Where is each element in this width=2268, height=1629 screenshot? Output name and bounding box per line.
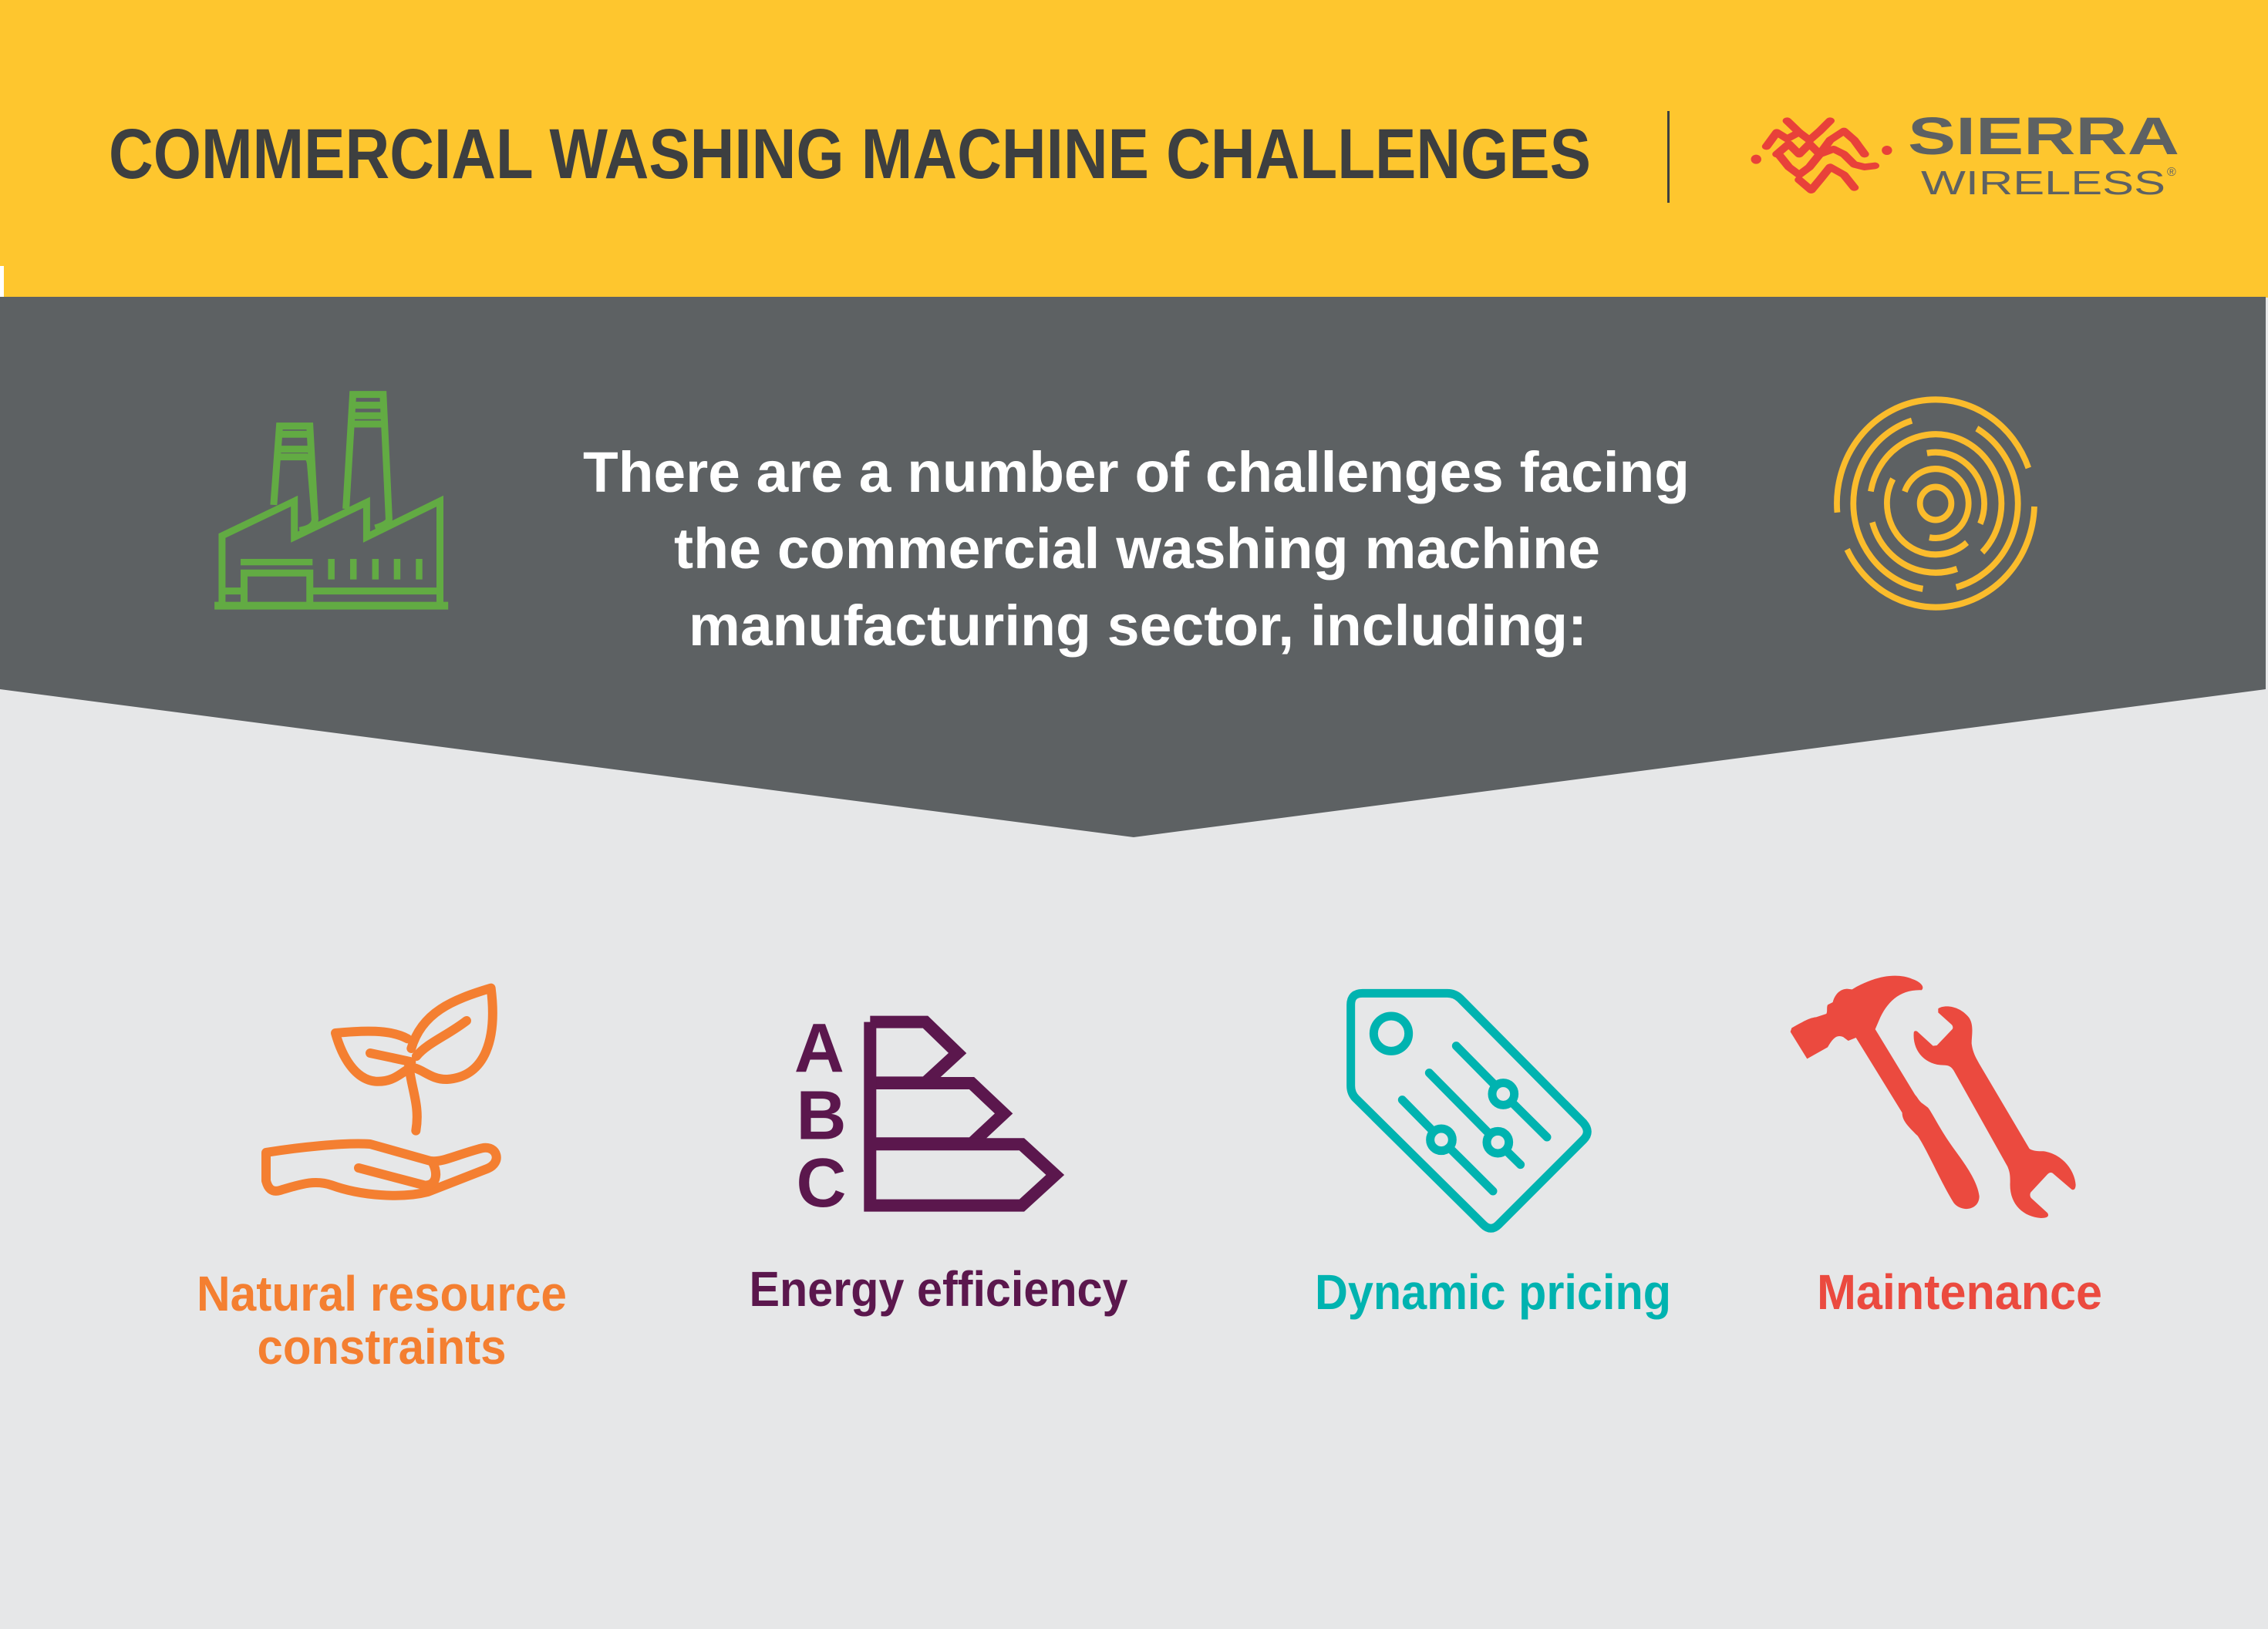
label: Energy efficiency xyxy=(750,1261,1128,1317)
icon: hammer and wrench xyxy=(1791,976,2076,1218)
label: Maintenance xyxy=(1817,1264,2102,1320)
header band xyxy=(0,0,2268,298)
divider xyxy=(1667,111,1670,203)
logo: sierra wireless: WIRELESS xyxy=(1921,164,2165,202)
intro text xyxy=(583,440,1690,658)
item: natural resource constraints xyxy=(197,988,567,1375)
icon: energy rating ABC: A xyxy=(794,1011,844,1088)
label: Dynamic pricing xyxy=(1315,1264,1671,1320)
icon: energy rating ABC: C xyxy=(797,1145,846,1222)
item: dynamic pricing xyxy=(1315,993,1671,1320)
icon: logo wave xyxy=(1751,121,1892,190)
logo: sierra wireless xyxy=(1751,106,2179,202)
icon: energy rating ABC xyxy=(794,1011,1055,1222)
icon: spiral xyxy=(1823,385,2048,621)
item: maintenance xyxy=(1791,976,2102,1320)
logo text: SIERRA xyxy=(1908,106,2179,166)
dark chevron panel xyxy=(0,297,2266,837)
item: energy efficiency xyxy=(750,1011,1128,1317)
icon: plant in hand xyxy=(266,988,497,1196)
icon: energy rating ABC: B xyxy=(797,1078,846,1155)
title: COMMERCIAL WASHING MACHINE CHALLENGES xyxy=(109,115,1591,194)
icon: factory xyxy=(214,395,448,610)
intro text: There are a number of challenges facing xyxy=(583,440,1690,504)
label: constraints xyxy=(258,1319,506,1375)
label: Natural resource xyxy=(197,1266,567,1321)
intro text: manufacturing sector, including: xyxy=(689,594,1587,658)
logo: sierra wireless: ® xyxy=(2167,166,2176,179)
intro text: the commercial washing machine xyxy=(674,517,1600,581)
icon: price tag with sliders xyxy=(1351,993,1587,1228)
